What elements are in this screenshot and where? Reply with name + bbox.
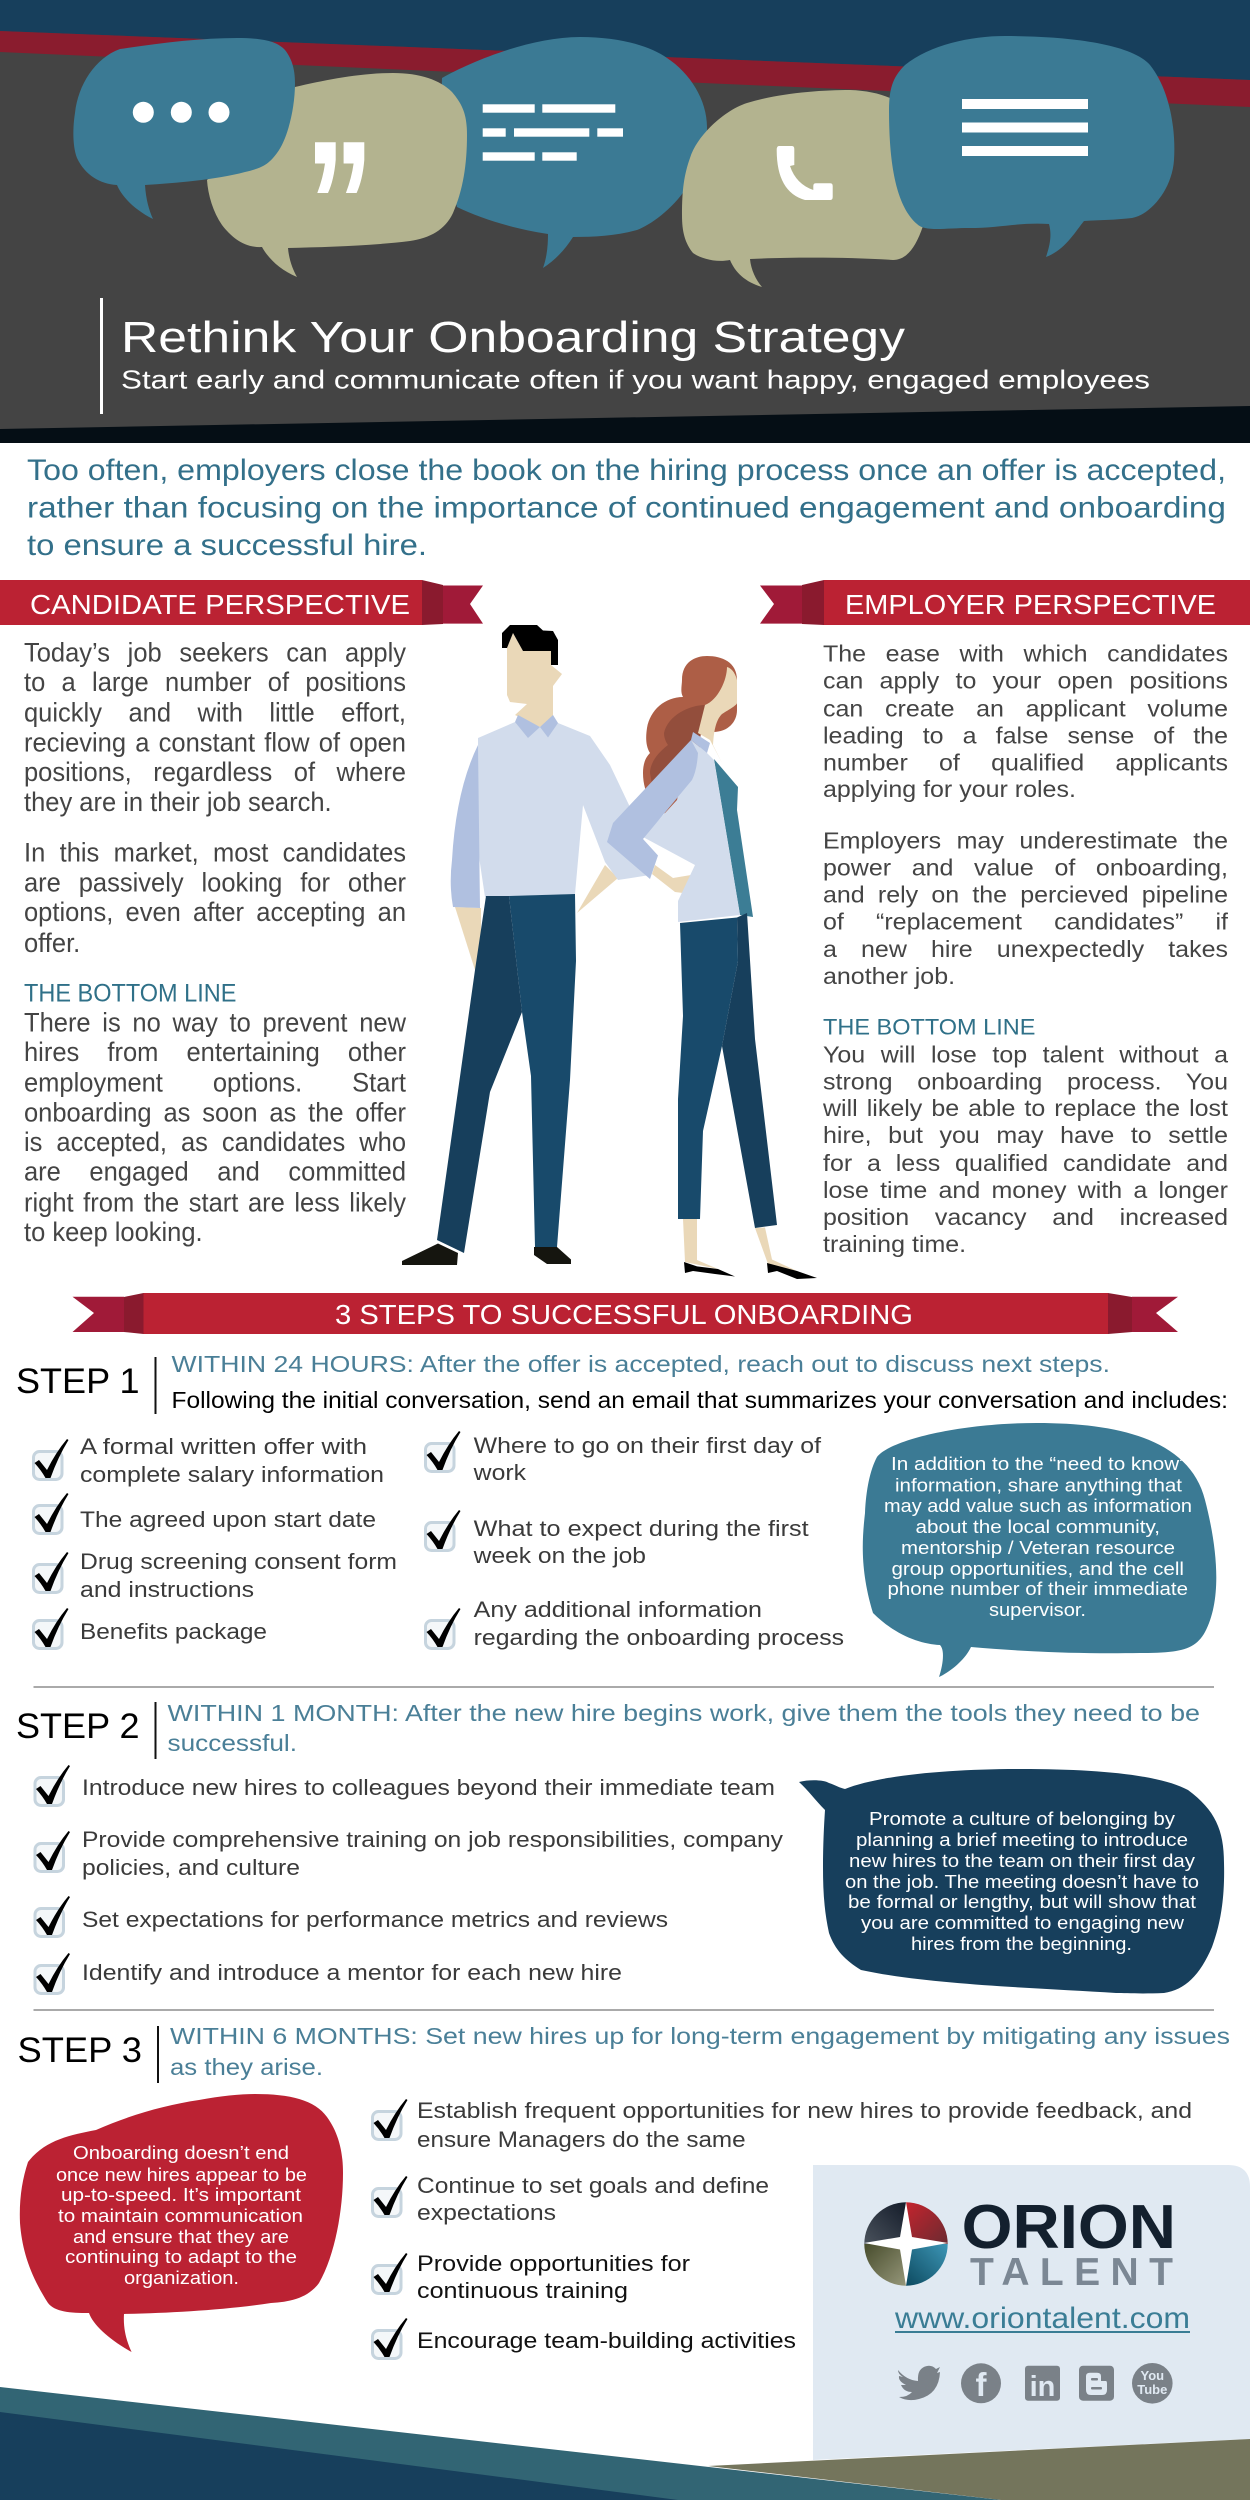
text block: candidate perspective: they are in their job search. — [24, 788, 332, 818]
text block: employer perspective: Employers may underestimate the — [823, 828, 1228, 854]
ribbon: candidate perspective: CANDIDATE PERSPECTIVE — [30, 589, 410, 620]
step 1 checklist: Benefits package — [80, 1619, 267, 1644]
text block: employer perspective: of “replacement candidates” if — [823, 909, 1228, 935]
callout: step 1 tip: supervisor. — [989, 1600, 1086, 1620]
icon: facebook: f — [976, 2366, 988, 2403]
step 2 heading: successful. — [168, 1730, 297, 1756]
callout: step 3 tip: organization. — [124, 2268, 239, 2288]
callout: step 2 tip: hires from the beginning. — [911, 1934, 1132, 1954]
callout: step 3 tip: and ensure that they are — [73, 2227, 289, 2247]
text block: candidate perspective: quickly and with little effort, — [24, 698, 406, 728]
step 1 checklist: regarding the onboarding process — [474, 1625, 844, 1650]
step 2 checklist: Provide comprehensive training on job responsibilities, company — [82, 1827, 784, 1852]
step 2 checklist: policies, and culture — [82, 1855, 300, 1880]
footer angled bands — [0, 2387, 1250, 2500]
ribbon: candidate perspective — [0, 580, 483, 625]
text block: candidate perspective: to a large number of positions — [24, 668, 406, 698]
step 3 checklist: Provide opportunities for — [417, 2251, 691, 2276]
step 1 heading — [16, 1351, 1228, 1414]
icon: speech bubble with text lines — [889, 36, 1174, 257]
text block: employer perspective: will likely be able to replace the lost — [823, 1096, 1228, 1122]
callout: step 1 tip: information, share anything that — [895, 1476, 1182, 1496]
step 1 heading: Following the initial conversation, send an email that summarizes your conversation and includes: — [172, 1387, 1228, 1413]
text block: candidate perspective: Today’s job seekers can apply — [24, 638, 406, 668]
icon: speech bubble with lines — [440, 37, 707, 268]
text block: candidate perspective: recieving a constant flow of open — [24, 728, 406, 758]
text block: employer perspective: power and value of onboarding, — [823, 855, 1228, 881]
step 2 checklist — [35, 1765, 784, 1994]
step 3 checklist — [372, 2098, 1192, 2358]
callout: step 3 tip — [20, 2094, 343, 2352]
icon: speech bubble with quote mark — [207, 73, 467, 277]
step 1 checklist: and instructions — [80, 1577, 254, 1602]
step 2 heading: STEP 2 — [16, 1707, 140, 1746]
callout: step 3 tip: once new hires appear to be — [56, 2165, 307, 2185]
step 3 checklist: Continue to set goals and define — [417, 2173, 769, 2198]
ribbon: employer perspective — [760, 580, 1250, 625]
icon: facebook — [961, 2363, 1001, 2403]
step 1 checklist: Any additional information — [474, 1597, 762, 1622]
icon: youtube: Tube — [1137, 2382, 1167, 2397]
icon: youtube: You — [1141, 2368, 1164, 2383]
step 1 checklist — [34, 1431, 844, 1650]
text block: employer perspective: another job. — [823, 964, 955, 990]
icon: youtube — [1132, 2363, 1173, 2404]
text block: employer perspective: can create an applicant volume — [823, 695, 1228, 721]
callout: step 1 tip — [863, 1423, 1216, 1677]
text block: candidate perspective — [24, 638, 406, 1248]
text block: employer perspective: for a less qualified candidate and — [823, 1150, 1228, 1176]
step 2 heading — [16, 1700, 1200, 1759]
icon: twitter — [898, 2366, 940, 2400]
text block: employer perspective — [823, 641, 1228, 1258]
callout: step 2 tip: be formal or lengthy, but will show that — [848, 1892, 1196, 1912]
text block: employer perspective: lose time and money with a longer — [823, 1177, 1228, 1204]
logo: Orion Talent: ORION — [962, 2193, 1176, 2262]
title block: Start early and communicate often if you want happy, engaged employees — [121, 364, 1150, 394]
icon: linkedin — [1025, 2366, 1060, 2403]
callout: step 1 tip: may add value such as information — [884, 1496, 1192, 1516]
callout: step 3 tip: to maintain communication — [58, 2206, 303, 2226]
text block: candidate perspective: onboarding as soon as the offer — [24, 1098, 406, 1128]
step 1 checklist: Where to go on their first day of — [474, 1433, 822, 1458]
text block: employer perspective: can apply to your open positions — [823, 668, 1228, 694]
text block: employer perspective: position vacancy and increased — [823, 1205, 1228, 1231]
callout: step 1 tip: group opportunities, and the cell — [892, 1559, 1184, 1579]
illustration: woman — [607, 656, 817, 1279]
step 3 heading: WITHIN 6 MONTHS: Set new hires up for long-term engagement by mitigating any issues — [170, 2023, 1230, 2049]
step 1 heading: WITHIN 24 HOURS: After the offer is accepted, reach out to discuss next steps. — [172, 1351, 1110, 1377]
text block: candidate perspective: to keep looking. — [24, 1218, 203, 1248]
callout: step 2 tip: planning a brief meeting to introduce — [856, 1830, 1188, 1850]
step 1 heading: STEP 1 — [16, 1362, 140, 1401]
callout: step 2 tip: on the job. The meeting doesn’t have to — [845, 1872, 1199, 1892]
text block: candidate perspective: right from the start are less likely — [24, 1188, 406, 1218]
intro text: rather than focusing on the importance of continued engagement and onboarding — [27, 492, 1226, 524]
text block: candidate perspective: THE BOTTOM LINE — [24, 979, 236, 1007]
icon: linkedin: in — [1030, 2371, 1055, 2403]
text block: candidate perspective: hires from entertaining other — [24, 1038, 406, 1068]
text block: candidate perspective: positions, regardless of where — [24, 758, 406, 788]
text block: candidate perspective: There is no way to prevent new — [24, 1008, 406, 1038]
logo: Orion Talent — [864, 2193, 1183, 2294]
callout: step 3 tip: continuing to adapt to the — [65, 2247, 297, 2267]
text block: candidate perspective: employment options. Start — [24, 1068, 406, 1098]
text block: employer perspective: leading to a false sense of the — [823, 723, 1228, 749]
step 1 checklist: A formal written offer with — [80, 1434, 367, 1459]
illustration: man — [402, 625, 650, 1265]
callout: step 2 tip: you are committed to engaging new — [861, 1913, 1185, 1933]
text block: employer perspective: and rely on the percieved pipeline — [823, 882, 1228, 908]
title block — [100, 298, 1150, 414]
step 1 checklist: The agreed upon start date — [80, 1507, 376, 1532]
callout: step 2 tip — [799, 1769, 1224, 1993]
header background — [0, 0, 1250, 443]
callout: step 2 tip: Promote a culture of belonging by — [869, 1809, 1175, 1829]
step 3 checklist: continuous training — [417, 2278, 628, 2303]
step 3 checklist: Establish frequent opportunities for new hires to provide feedback, and — [417, 2098, 1192, 2123]
text block: employer perspective: strong onboarding process. You — [823, 1069, 1228, 1095]
text block: employer perspective: The ease with which candidates — [823, 641, 1228, 667]
intro text — [27, 454, 1226, 562]
footer panel: logo and contact — [813, 2165, 1250, 2460]
icon: speech bubble with dots — [73, 38, 295, 219]
step 2 checklist: Identify and introduce a mentor for each new hire — [82, 1960, 622, 1985]
step 3 checklist: expectations — [417, 2200, 556, 2225]
callout: step 3 tip: up-to-speed. It’s important — [61, 2185, 301, 2205]
ribbon: 3 steps heading: 3 STEPS TO SUCCESSFUL ONBOARDING — [335, 1299, 913, 1330]
text block: candidate perspective: In this market, most candidates — [24, 838, 406, 868]
callout: step 1 tip: phone number of their immediate — [888, 1579, 1188, 1599]
ribbon: employer perspective: EMPLOYER PERSPECTIVE — [845, 589, 1216, 620]
text block: employer perspective: number of qualified applicants — [823, 750, 1228, 776]
text block: candidate perspective: is accepted, as candidates who — [24, 1128, 406, 1158]
callout: step 1 tip: mentorship / Veteran resource — [901, 1538, 1175, 1558]
callout: step 2 tip: new hires to the team on their first day — [849, 1851, 1195, 1871]
step 2 checklist: Set expectations for performance metrics and reviews — [82, 1907, 668, 1932]
step 3 heading: STEP 3 — [18, 2031, 142, 2070]
text block: candidate perspective: offer. — [24, 928, 80, 958]
icon: speech bubble with phone — [682, 90, 923, 287]
step 1 checklist: complete salary information — [80, 1462, 384, 1487]
step 1 checklist: week on the job — [473, 1543, 646, 1568]
step 3 checklist: Encourage team-building activities — [417, 2328, 796, 2353]
icon: blogger — [1079, 2366, 1114, 2401]
text block: candidate perspective: are passively looking for other — [24, 868, 406, 898]
text block: candidate perspective: are engaged and committed — [24, 1158, 406, 1188]
callout: step 1 tip: In addition to the “need to know” — [891, 1454, 1186, 1474]
text block: employer perspective: applying for your roles. — [823, 777, 1076, 803]
step 3 checklist: ensure Managers do the same — [417, 2127, 746, 2152]
title block: Rethink Your Onboarding Strategy — [121, 313, 905, 362]
step 2 checklist: Introduce new hires to colleagues beyond their immediate team — [82, 1775, 775, 1800]
text block: employer perspective: You will lose top talent without a — [823, 1041, 1228, 1068]
ribbon: 3 steps heading — [72, 1293, 1178, 1334]
step 3 heading: as they arise. — [170, 2054, 323, 2080]
text block: employer perspective: training time. — [823, 1232, 966, 1258]
step 1 checklist: work — [473, 1460, 527, 1485]
text block: employer perspective: a new hire unexpectedly takes — [823, 936, 1228, 962]
intro text: to ensure a successful hire. — [27, 529, 427, 562]
text block: employer perspective: hire, but you may have to settle — [823, 1123, 1228, 1149]
callout: step 1 tip: about the local community, — [916, 1517, 1160, 1537]
step 1 checklist: Drug screening consent form — [80, 1549, 397, 1574]
text block: candidate perspective: options, even after accepting an — [24, 898, 406, 928]
callout: step 3 tip: Onboarding doesn’t end — [73, 2143, 289, 2163]
step 2 heading: WITHIN 1 MONTH: After the new hire begins work, give them the tools they need to be — [168, 1700, 1200, 1726]
step 3 heading — [18, 2023, 1230, 2083]
intro text: Too often, employers close the book on the hiring process once an offer is accepted, — [27, 454, 1226, 487]
step 1 checklist: What to expect during the first — [474, 1516, 810, 1541]
logo: Orion Talent: TALENT — [970, 2251, 1183, 2294]
text block: employer perspective: THE BOTTOM LINE — [823, 1015, 1035, 1039]
website link: www.oriontalent.com — [894, 2302, 1190, 2335]
